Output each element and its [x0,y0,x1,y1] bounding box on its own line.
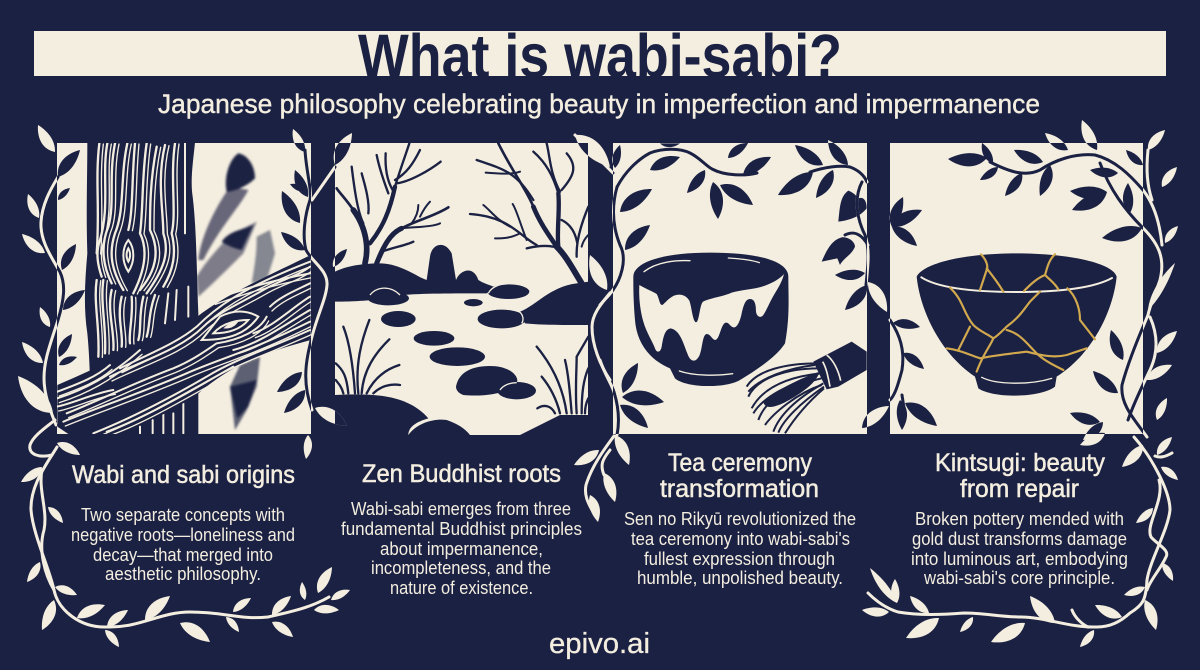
heading: transformation [660,475,819,503]
trunk grain [96,143,188,433]
body [71,504,295,584]
tea bowl [633,253,789,386]
text block: kintsugi beauty from repair [911,449,1128,588]
tree trunk [85,142,198,434]
gold cracks [947,254,1095,372]
body: negative roots—loneliness and [71,524,295,545]
body: wabi-sabi's core principle. [923,567,1115,588]
heading: Tea ceremony [668,449,812,477]
text block: tea ceremony transformation [624,449,856,588]
heading: Kintsugi: beauty [935,449,1105,477]
bamboo whisk [747,342,867,433]
text block: zen buddhist roots [341,460,582,598]
body: gold dust transforms damage [912,528,1127,549]
subtitle: Japanese philosophy celebrating beauty in imperfection and impermanence [158,89,1040,119]
body [624,508,856,588]
body: fundamental Buddhist principles [341,518,582,539]
right bare tree [470,143,588,283]
body: tea ceremony into wabi-sabi's [631,528,850,549]
body: Wabi-sabi emerges from three [351,498,571,519]
kintsugi bowl [917,253,1117,396]
title: What is wabi-sabi? [358,22,842,90]
heading [935,449,1105,503]
body: aesthetic philosophy. [105,563,261,584]
fallen branch [57,255,311,434]
footer brand: epivo.ai [549,628,650,660]
branch grain [57,262,312,438]
title banner [34,31,1166,76]
body: into luminous art, embodying [911,548,1128,569]
panel: kintsugi bowl illustration [890,143,1143,434]
body: Sen no Rikyū revolutionized the [624,508,856,529]
heading [660,449,819,503]
heart-shaped leaves [838,191,867,222]
panel: tea bowl and whisk illustration [613,143,867,434]
thick vine band at top [660,143,680,147]
heading: from repair [960,475,1079,503]
brush strokes [197,153,275,430]
heading: Zen Buddhist roots [362,460,561,488]
vines: cream on navy [10,118,1181,650]
body: fullest expression through [644,548,835,569]
grass tufts [336,320,588,413]
dripping glaze [639,274,784,361]
body: nature of existence. [390,577,533,598]
panel: wood grain illustration [57,142,312,438]
banks and rocks [335,245,493,302]
body: Broken pottery mended with [915,508,1124,529]
bowl rim and foot highlights [921,277,1112,383]
body [911,508,1128,588]
left bare tree [337,143,448,263]
stone highlights [370,284,523,390]
text block: wabi and sabi origins [71,461,295,584]
heading: Wabi and sabi origins [72,461,295,489]
panel: zen garden illustration [335,143,588,435]
body: humble, unpolished beauty. [637,567,843,588]
vines: navy over panels [57,143,1143,434]
body: Two separate concepts with [81,504,285,525]
body [341,498,582,598]
body: incompleteness, and the [371,557,551,578]
body: about impermanence, [380,538,543,559]
stepping stones [368,284,536,399]
body: decay—that merged into [93,544,273,565]
bowl highlights [644,258,759,375]
